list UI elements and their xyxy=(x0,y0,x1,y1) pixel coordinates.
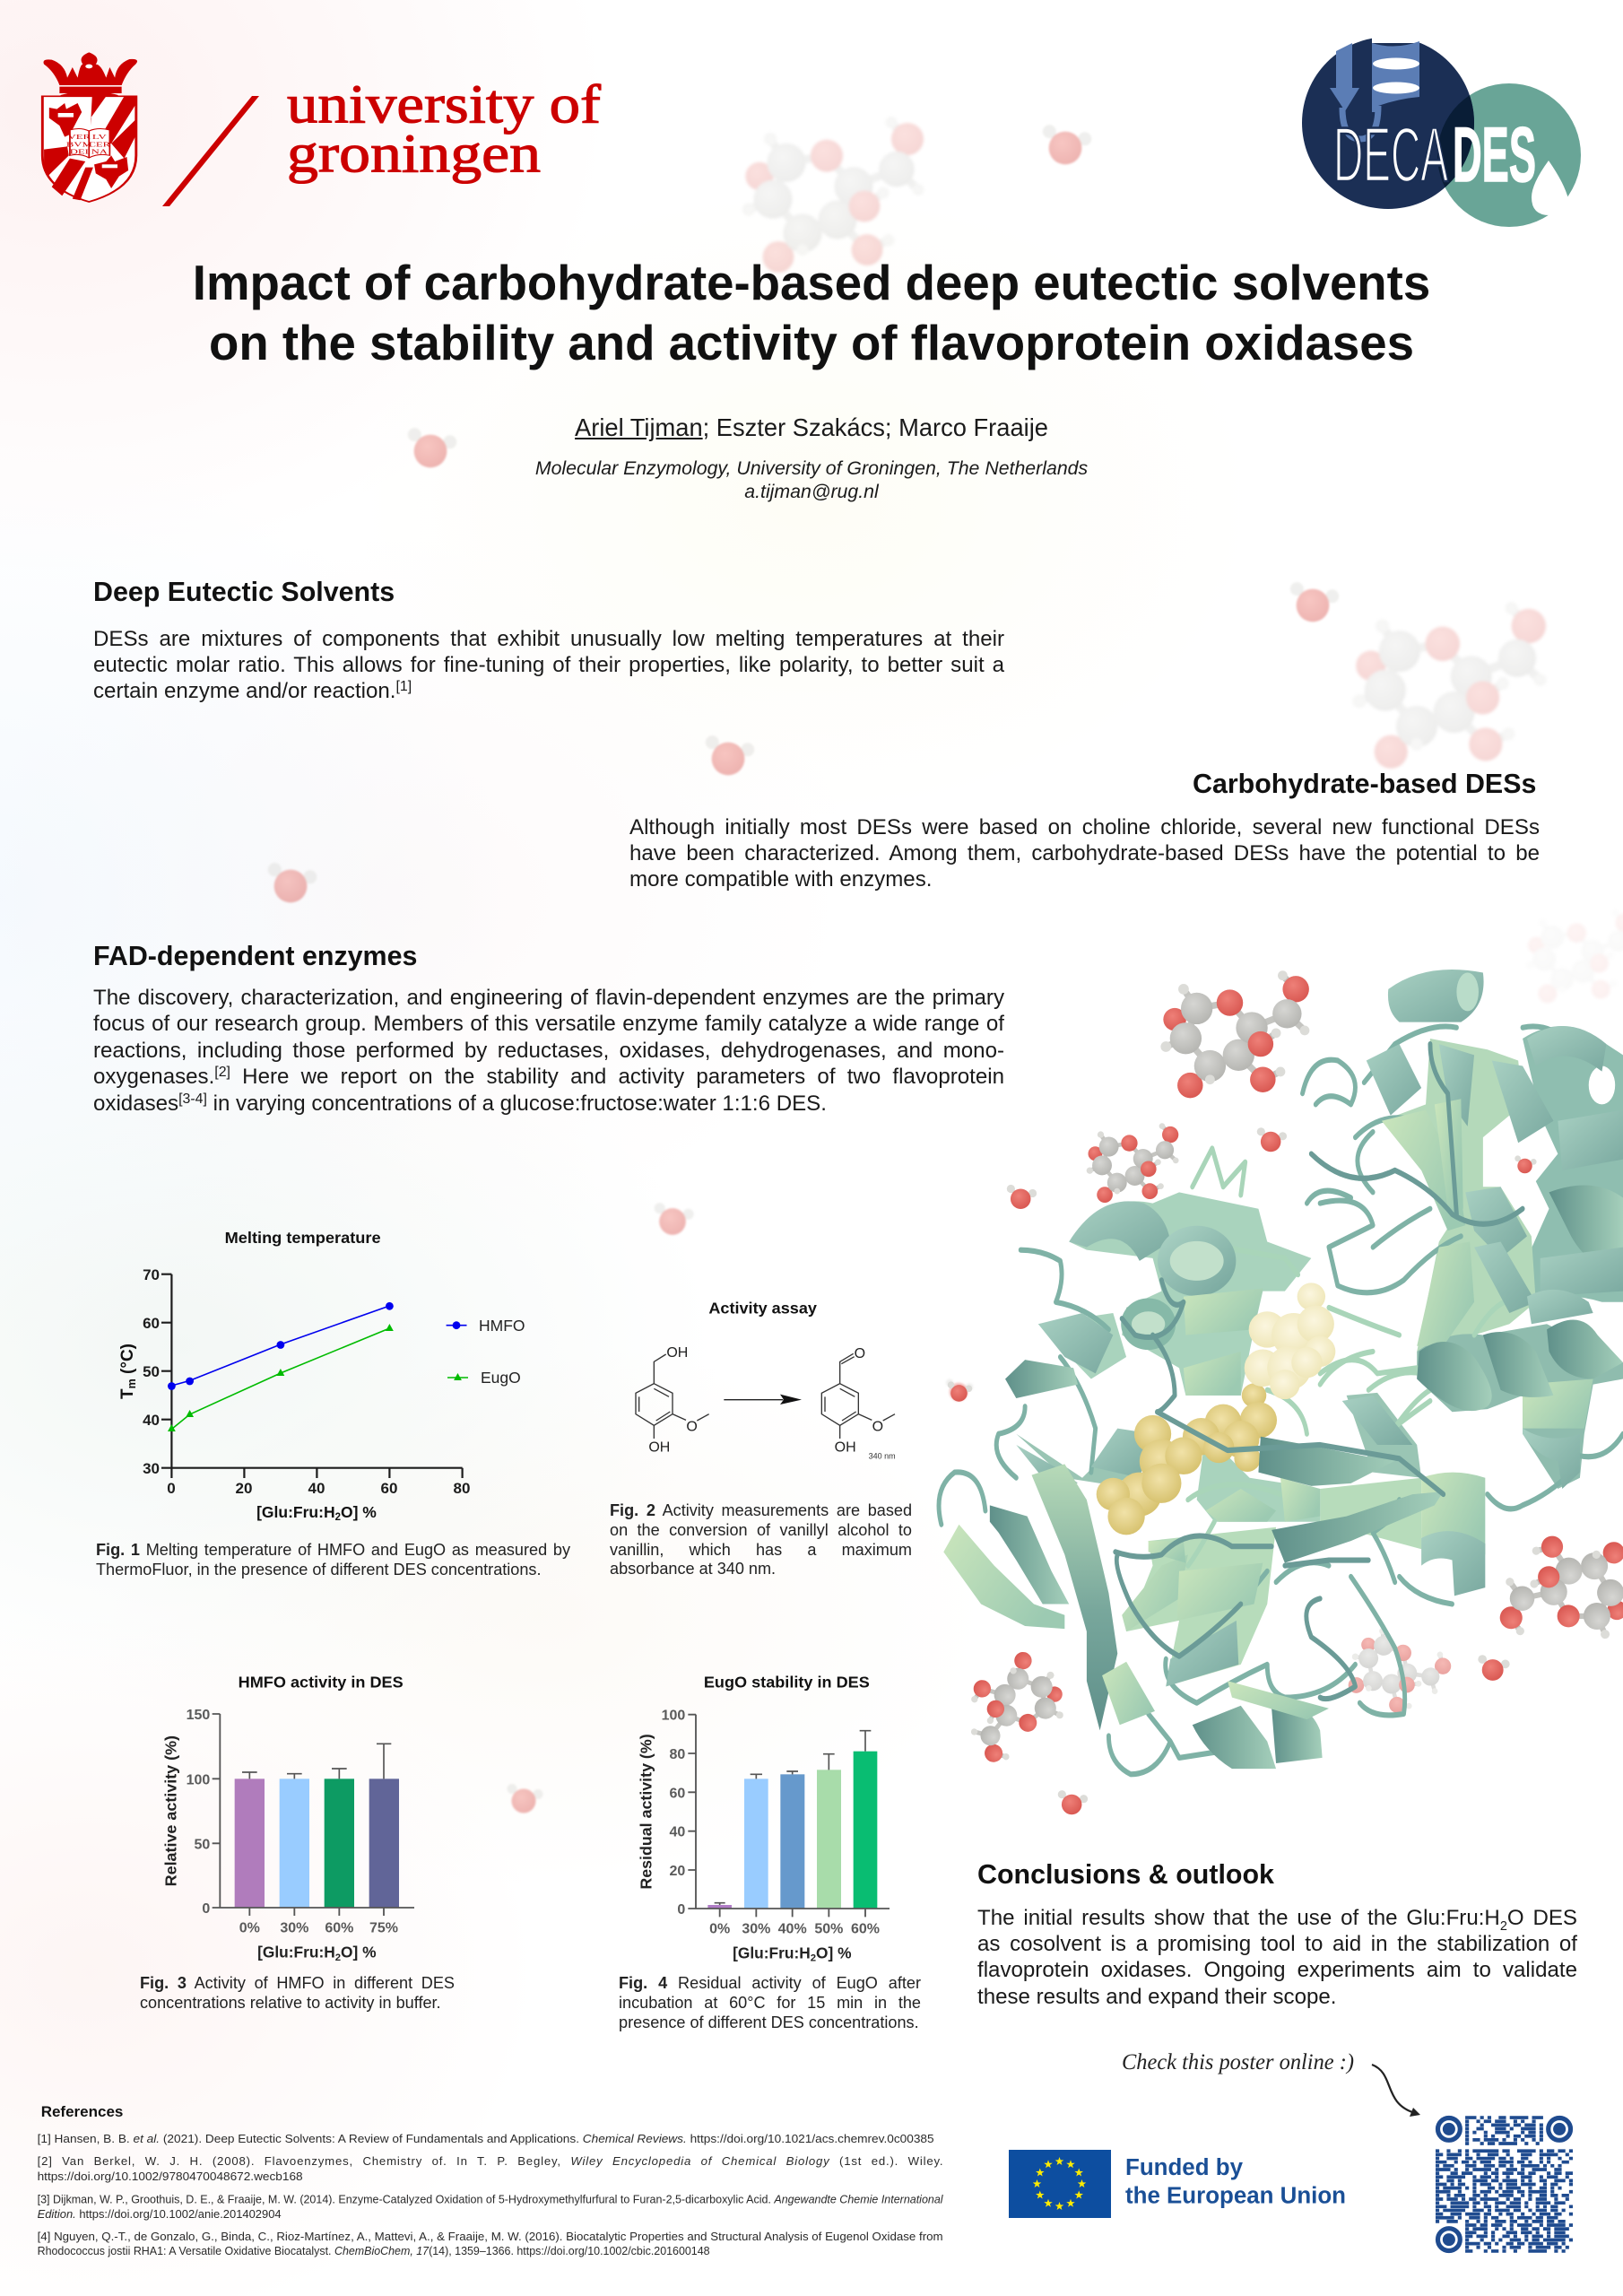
x axis title: 2 xyxy=(811,1953,816,1964)
caption: figure 4: Fig. 4 Residual activity of EugO after xyxy=(619,1974,921,1992)
chart title: Melting temperature xyxy=(225,1229,381,1247)
icon: coat of arms xyxy=(42,52,137,202)
chart: HMFO activity in DES xyxy=(162,1673,414,1963)
reference list: [4] Nguyen, Q.-T., de Gonzalo, G., Binda, C., Rioz-Martínez, A., Mattevi, A., & Fraaije, M. W. (2016). Biocatalytic Properties and Structural Analysis of Eugenol Oxidase from xyxy=(38,2230,943,2243)
affiliation xyxy=(535,457,1088,502)
text: DES intro xyxy=(93,626,1004,703)
legend xyxy=(447,1317,525,1387)
text: conclusions: The initial results show that the use of the Glu:Fru:H2O DES xyxy=(977,1905,1577,1933)
title: on the stability and activity of flavoprotein oxidases xyxy=(209,316,1414,370)
caption: figure 3: Fig. 3 Activity of HMFO in different DES xyxy=(140,1974,455,1992)
x axis title: O] % xyxy=(816,1944,852,1961)
axes xyxy=(161,1274,463,1478)
references xyxy=(38,2103,944,2257)
axes xyxy=(213,1714,414,1916)
icon: coat of arms: VER xyxy=(68,134,91,141)
x axis title: [Glu:Fru:H xyxy=(256,1503,335,1521)
text: FAD enzymes: reactions, including those performed by reductases, oxidases, dehydrogenases, and mono- xyxy=(93,1039,1004,1063)
text: carbohydrate DES: Although initially most DESs were based on choline chloride, several new functional DESs xyxy=(629,814,1540,839)
text: DES intro: certain enzyme and/or reaction.[1] xyxy=(93,679,412,703)
tick labels: 20 xyxy=(670,1864,685,1879)
tick labels: 80 xyxy=(454,1480,470,1497)
title: Impact of carbohydrate-based deep eutectic solvents xyxy=(193,256,1430,310)
tick labels: 50% xyxy=(814,1921,843,1936)
caption: figure 1: Fig. 1 Melting temperature of HMFO and EugO as measured by xyxy=(96,1541,570,1559)
text: conclusions: as cosolvent is a promising tool to aid in the stabilization of xyxy=(977,1932,1577,1956)
protein right domain xyxy=(1342,970,1623,1596)
protein front loops and sheets xyxy=(1115,1044,1523,1699)
tick labels xyxy=(143,1266,470,1497)
text: carbohydrate DES: more compatible with enzymes. xyxy=(629,867,932,891)
chart: activity assay reaction scheme: 340 nm xyxy=(869,1452,896,1461)
protein left domain xyxy=(943,1201,1329,1769)
chart: activity assay reaction scheme: O xyxy=(855,1346,865,1361)
vanillyl alcohol xyxy=(636,1354,709,1439)
reference list: Rhodococcus jostii RHA1: A Versatile Oxidative Biocatalyst. ChemBioChem, 17(14), 1359–1366. https://doi.org/10.1002/cbic.201600148 xyxy=(38,2244,710,2257)
error bars xyxy=(715,1731,871,1905)
reference list: [2] Van Berkel, W. J. H. (2008). Flavoenzymes, Chemistry of. In T. P. Begley, Wiley Encyclopedia of Chemical Biology (1st ed.). Wiley. xyxy=(38,2154,943,2168)
text: carbohydrate DES: have been characterized. Among them, carbohydrate-based DESs have the potential to be xyxy=(629,841,1540,865)
tick labels: 60% xyxy=(851,1921,880,1936)
scheme title: Activity assay xyxy=(708,1299,817,1317)
chart: activity assay reaction scheme: OH xyxy=(835,1439,856,1455)
chart title: HMFO activity in DES xyxy=(239,1673,404,1691)
chart: melting temperature xyxy=(118,1229,525,1523)
series: EugO xyxy=(168,1324,394,1431)
tick labels: 100 xyxy=(662,1709,685,1724)
y axis title: m xyxy=(126,1378,138,1388)
caption: figure 3: concentrations relative to activity in buffer. xyxy=(140,1994,441,2012)
chart: activity assay reaction scheme: O xyxy=(686,1419,698,1434)
text: FAD enzymes: focus of our research group. Members of this versatile enzyme family catalyze a wide range of xyxy=(93,1012,1004,1036)
tick labels: 0 xyxy=(202,1901,210,1917)
legend: EugO xyxy=(481,1369,521,1387)
text: FAD enzymes: The discovery, characterization, and engineering of flavin-dependent enzymes are the primary xyxy=(93,986,1004,1010)
tick labels: 80 xyxy=(670,1747,685,1762)
funding text: the European Union xyxy=(1125,2184,1346,2209)
legend: HMFO xyxy=(479,1317,525,1335)
references heading: References xyxy=(41,2103,123,2120)
bars xyxy=(235,1779,399,1908)
protein loops rear xyxy=(939,1026,1623,1774)
tick labels: 60 xyxy=(143,1315,160,1332)
authors: Ariel Tijman; Eszter Szakács; Marco Fraaije xyxy=(575,413,1048,441)
x axis title: [Glu:Fru:H xyxy=(257,1944,335,1961)
funding: EU flag and text xyxy=(1009,2150,1346,2218)
icon: coat of arms: LV xyxy=(92,134,107,141)
text: conclusions xyxy=(977,1905,1577,2009)
tick labels: 30% xyxy=(280,1920,308,1935)
icon: coat of arms: DEI xyxy=(70,149,90,156)
caption: figure 4: incubation at 60°C for 15 min in the xyxy=(619,1994,921,2012)
icon: coat of arms: NA xyxy=(91,149,108,156)
y axis title: T xyxy=(118,1388,137,1399)
tick labels: 0 xyxy=(167,1480,176,1497)
handwritten note with arrow xyxy=(1122,2050,1420,2117)
tick labels: 60 xyxy=(670,1786,685,1801)
affiliation: Molecular Enzymology, University of Groningen, The Netherlands xyxy=(535,457,1088,479)
logo: DECADES xyxy=(1302,38,1581,227)
funding text xyxy=(1125,2155,1346,2209)
text: conclusions: these results and expand their scope. xyxy=(977,1985,1336,2009)
text: FAD enzymes xyxy=(93,986,1004,1116)
icon: coat of arms: BVM xyxy=(66,142,92,148)
heading: Deep Eutectic Solvents: Deep Eutectic Solvents xyxy=(93,576,395,606)
reference list xyxy=(38,2132,944,2257)
x axis title: O] % xyxy=(341,1944,377,1961)
tick labels: 75% xyxy=(369,1920,398,1935)
heading: Conclusions & outlook: Conclusions & outlook xyxy=(977,1858,1274,1889)
chart: EugO stability in DES xyxy=(638,1673,890,1964)
tick labels: 30 xyxy=(143,1460,160,1477)
text: FAD enzymes: oxygenases.[2] Here we report on the stability and activity parameters of two flavoprotein xyxy=(93,1065,1004,1089)
text: DES intro: DESs are mixtures of components that exhibit unusually low melting temperatures at their xyxy=(93,626,1004,651)
tick labels: 0% xyxy=(709,1921,730,1936)
tick labels: 50 xyxy=(195,1837,210,1852)
protein background masses xyxy=(1016,1026,1623,1686)
vanillin xyxy=(821,1353,895,1439)
tick labels: 40 xyxy=(143,1412,160,1429)
reference list: https://doi.org/10.1002/9780470048672.wecb168 xyxy=(38,2170,303,2183)
caption: figure 2: Fig. 2 Activity measurements are based xyxy=(610,1501,912,1519)
tick labels: 70 xyxy=(143,1266,160,1283)
handwritten note with arrow: Check this poster online :) xyxy=(1122,2050,1354,2074)
chart: activity assay reaction scheme: O xyxy=(872,1419,883,1434)
logo: DECADES: DECA xyxy=(1333,112,1448,198)
tick labels: 40 xyxy=(670,1825,685,1840)
caption: figure 4: presence of different DES concentrations. xyxy=(619,2013,919,2031)
icon: helix and arrow xyxy=(1330,27,1419,139)
x axis title: 2 xyxy=(335,1512,341,1523)
tick labels: 30% xyxy=(742,1921,770,1936)
bars xyxy=(707,1752,877,1909)
heading: Carbohydrate-based DESs: Carbohydrate-based DESs xyxy=(1193,768,1536,798)
title xyxy=(193,256,1430,370)
caption: figure 2: on the conversion of vanillyl alcohol to xyxy=(610,1521,912,1539)
chart: activity assay reaction scheme: OH xyxy=(648,1439,670,1455)
affiliation: a.tijman@rug.nl xyxy=(744,481,879,502)
caption: figure 2: vanillin, which has a maximum xyxy=(610,1541,912,1559)
error bars xyxy=(242,1744,391,1779)
icon: coat of arms: CER xyxy=(88,142,110,148)
tick labels: 40 xyxy=(308,1480,325,1497)
logo wordmark: university of xyxy=(287,75,602,135)
tick labels: 40% xyxy=(778,1921,807,1936)
text: FAD enzymes: oxidases[3-4] in varying concentrations of a glucose:fructose:water 1:1:6 DES. xyxy=(93,1091,827,1116)
tick labels: 100 xyxy=(187,1772,210,1787)
heading: FAD-dependent enzymes: FAD-dependent enzymes xyxy=(93,941,417,971)
reference list: [3] Dijkman, W. P., Groothuis, D. E., & Fraaije, M. W. (2014). Enzyme-Catalyzed Oxidation of 5-Hydroxymethylfurfural to Furan-2,5-dicarboxylic Acid. Angewandte Chemie International xyxy=(38,2192,944,2206)
x axis title: O] % xyxy=(341,1503,377,1521)
caption: figure 2: absorbance at 340 nm. xyxy=(610,1560,776,1578)
icon: drop xyxy=(1532,161,1568,218)
caption: figure 2 xyxy=(610,1501,912,1578)
axes xyxy=(688,1715,890,1917)
text: DES intro: eutectic molar ratio. This allows for fine-tuning of their properties, like polarity, to better suit a xyxy=(93,653,1004,677)
tick labels xyxy=(662,1709,880,1936)
tick labels: 60% xyxy=(325,1920,353,1935)
funding text: Funded by xyxy=(1125,2155,1244,2180)
QR code xyxy=(1435,2115,1573,2253)
icon: curved arrow xyxy=(1372,2065,1420,2117)
x axis title: [Glu:Fru:H xyxy=(733,1944,811,1961)
y axis title: (°C) xyxy=(118,1344,137,1378)
chart: activity assay reaction scheme: OH xyxy=(666,1345,688,1361)
caption: figure 4 xyxy=(619,1974,921,2031)
protein structure illustration xyxy=(936,970,1623,1815)
chart: activity assay reaction scheme xyxy=(635,1299,896,1461)
logo wordmark xyxy=(287,75,602,185)
icon: EU flag xyxy=(1009,2150,1111,2218)
tick labels: 50 xyxy=(143,1363,160,1380)
tick labels: 150 xyxy=(187,1708,210,1723)
y axis title: Residual activity (%) xyxy=(638,1734,655,1890)
logo wordmark: groningen xyxy=(287,124,541,185)
logo: DECADES: DES xyxy=(1453,112,1536,198)
caption: figure 3 xyxy=(140,1974,455,2012)
chart title: EugO stability in DES xyxy=(704,1673,870,1691)
series: HMFO xyxy=(168,1302,394,1390)
tick labels: 0 xyxy=(677,1902,685,1918)
molecule: sugars and water around protein xyxy=(948,970,1623,1814)
reference list: [1] Hansen, B. B. et al. (2021). Deep Eutectic Solvents: A Review of Fundamentals and Applications. Chemical Reviews. https://doi.org/10.1021/acs.chemrev.0c00385 xyxy=(38,2132,934,2145)
tick labels xyxy=(187,1708,398,1935)
x axis title: 2 xyxy=(335,1952,341,1963)
caption: figure 1 xyxy=(96,1541,570,1578)
text: conclusions: flavoprotein oxidases. Ongoing experiments aim to validate xyxy=(977,1958,1577,1982)
tick labels: 60 xyxy=(381,1480,397,1497)
FAD cofactor spheres xyxy=(1097,1283,1335,1535)
text: carbohydrate DES xyxy=(629,814,1540,891)
logo: university of groningen xyxy=(41,52,602,206)
tick labels: 0% xyxy=(239,1920,260,1935)
caption: figure 1: ThermoFluor, in the presence of different DES concentrations. xyxy=(96,1561,542,1578)
reference list: Edition. https://doi.org/10.1002/anie.201402904 xyxy=(38,2207,282,2221)
slash xyxy=(162,96,259,206)
reaction arrow xyxy=(724,1395,802,1405)
y axis title: Relative activity (%) xyxy=(162,1735,180,1886)
tick labels: 20 xyxy=(236,1480,252,1497)
